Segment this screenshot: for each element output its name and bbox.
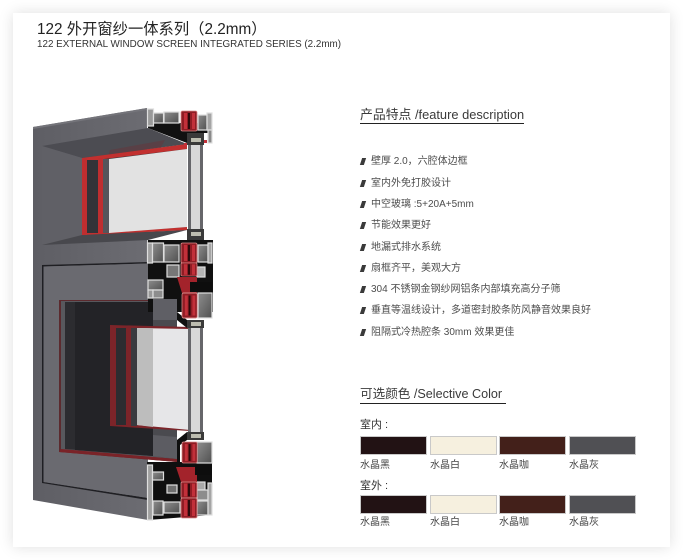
insulating glass edge xyxy=(187,133,204,440)
outdoor label: 室外 : xyxy=(360,480,388,492)
indoor name: crystal coffee: 水晶咖 xyxy=(499,460,529,471)
lower glass pane xyxy=(137,328,190,430)
feature 2: 室内外免打胶设计 xyxy=(371,178,451,189)
lower sash face xyxy=(42,262,148,500)
outdoor swatch: crystal coffee xyxy=(499,495,566,514)
feature 5: 地漏式排水系统 xyxy=(371,242,441,253)
indoor name: crystal black: 水晶黑 xyxy=(360,460,390,471)
indoor name: crystal white: 水晶白 xyxy=(430,460,460,471)
feature 6: 扇框齐平，美观大方 xyxy=(371,263,461,274)
outdoor name: crystal gray: 水晶灰 xyxy=(569,517,599,528)
english subtitle: 122 EXTERNAL WINDOW SCREEN INTEGRATED SERIES (2.2mm) xyxy=(37,39,341,50)
feature 9: 阻隔式冷热腔条 30mm 效果更佳 xyxy=(371,327,514,338)
indoor swatch: crystal coffee xyxy=(499,436,566,455)
outdoor name: crystal white: 水晶白 xyxy=(430,517,460,528)
panel: selective color xyxy=(360,387,636,528)
panel: feature description xyxy=(360,107,591,338)
outdoor name: crystal coffee: 水晶咖 xyxy=(499,517,529,528)
chinese title: 122 外开窗纱一体系列（2.2mm） xyxy=(37,21,266,38)
lower red frame xyxy=(110,325,190,431)
top profile section xyxy=(148,109,212,146)
bottom profile section xyxy=(147,432,212,520)
feature 1: 壁厚 2.0，六腔体边框 xyxy=(371,156,468,167)
indoor swatch: crystal white xyxy=(430,436,497,455)
feature heading: 产品特点 /feature description xyxy=(360,107,524,122)
outdoor swatch: crystal black xyxy=(360,495,427,514)
upper glass pane xyxy=(109,149,187,233)
indoor swatch: crystal black xyxy=(360,436,427,455)
feature 3: 中空玻璃 :5+20A+5mm xyxy=(371,199,474,210)
indoor name: crystal gray: 水晶灰 xyxy=(569,460,599,471)
indoor label: 室内 : xyxy=(360,419,388,431)
feature 7: 304 不锈钢金钢纱网铝条内部填充高分子筛 xyxy=(371,284,560,295)
upper red frame xyxy=(82,144,187,235)
upper fixed frame face xyxy=(33,108,148,520)
feature 8: 垂直等温线设计，多道密封胶条防风静音效果良好 xyxy=(371,305,591,316)
outdoor name: crystal black: 水晶黑 xyxy=(360,517,390,528)
middle profile section xyxy=(148,240,213,328)
insect screen recess xyxy=(59,300,190,462)
feature 4: 节能效果更好 xyxy=(371,220,431,231)
title block xyxy=(37,20,341,50)
upper window recess xyxy=(42,128,187,245)
outdoor swatch: crystal white xyxy=(430,495,497,514)
feature heading underline xyxy=(360,123,524,124)
outdoor swatch: crystal gray xyxy=(569,495,636,514)
indoor swatch: crystal gray xyxy=(569,436,636,455)
color heading underline xyxy=(360,403,506,404)
color heading: 可选颜色 /Selective Color xyxy=(360,387,502,401)
